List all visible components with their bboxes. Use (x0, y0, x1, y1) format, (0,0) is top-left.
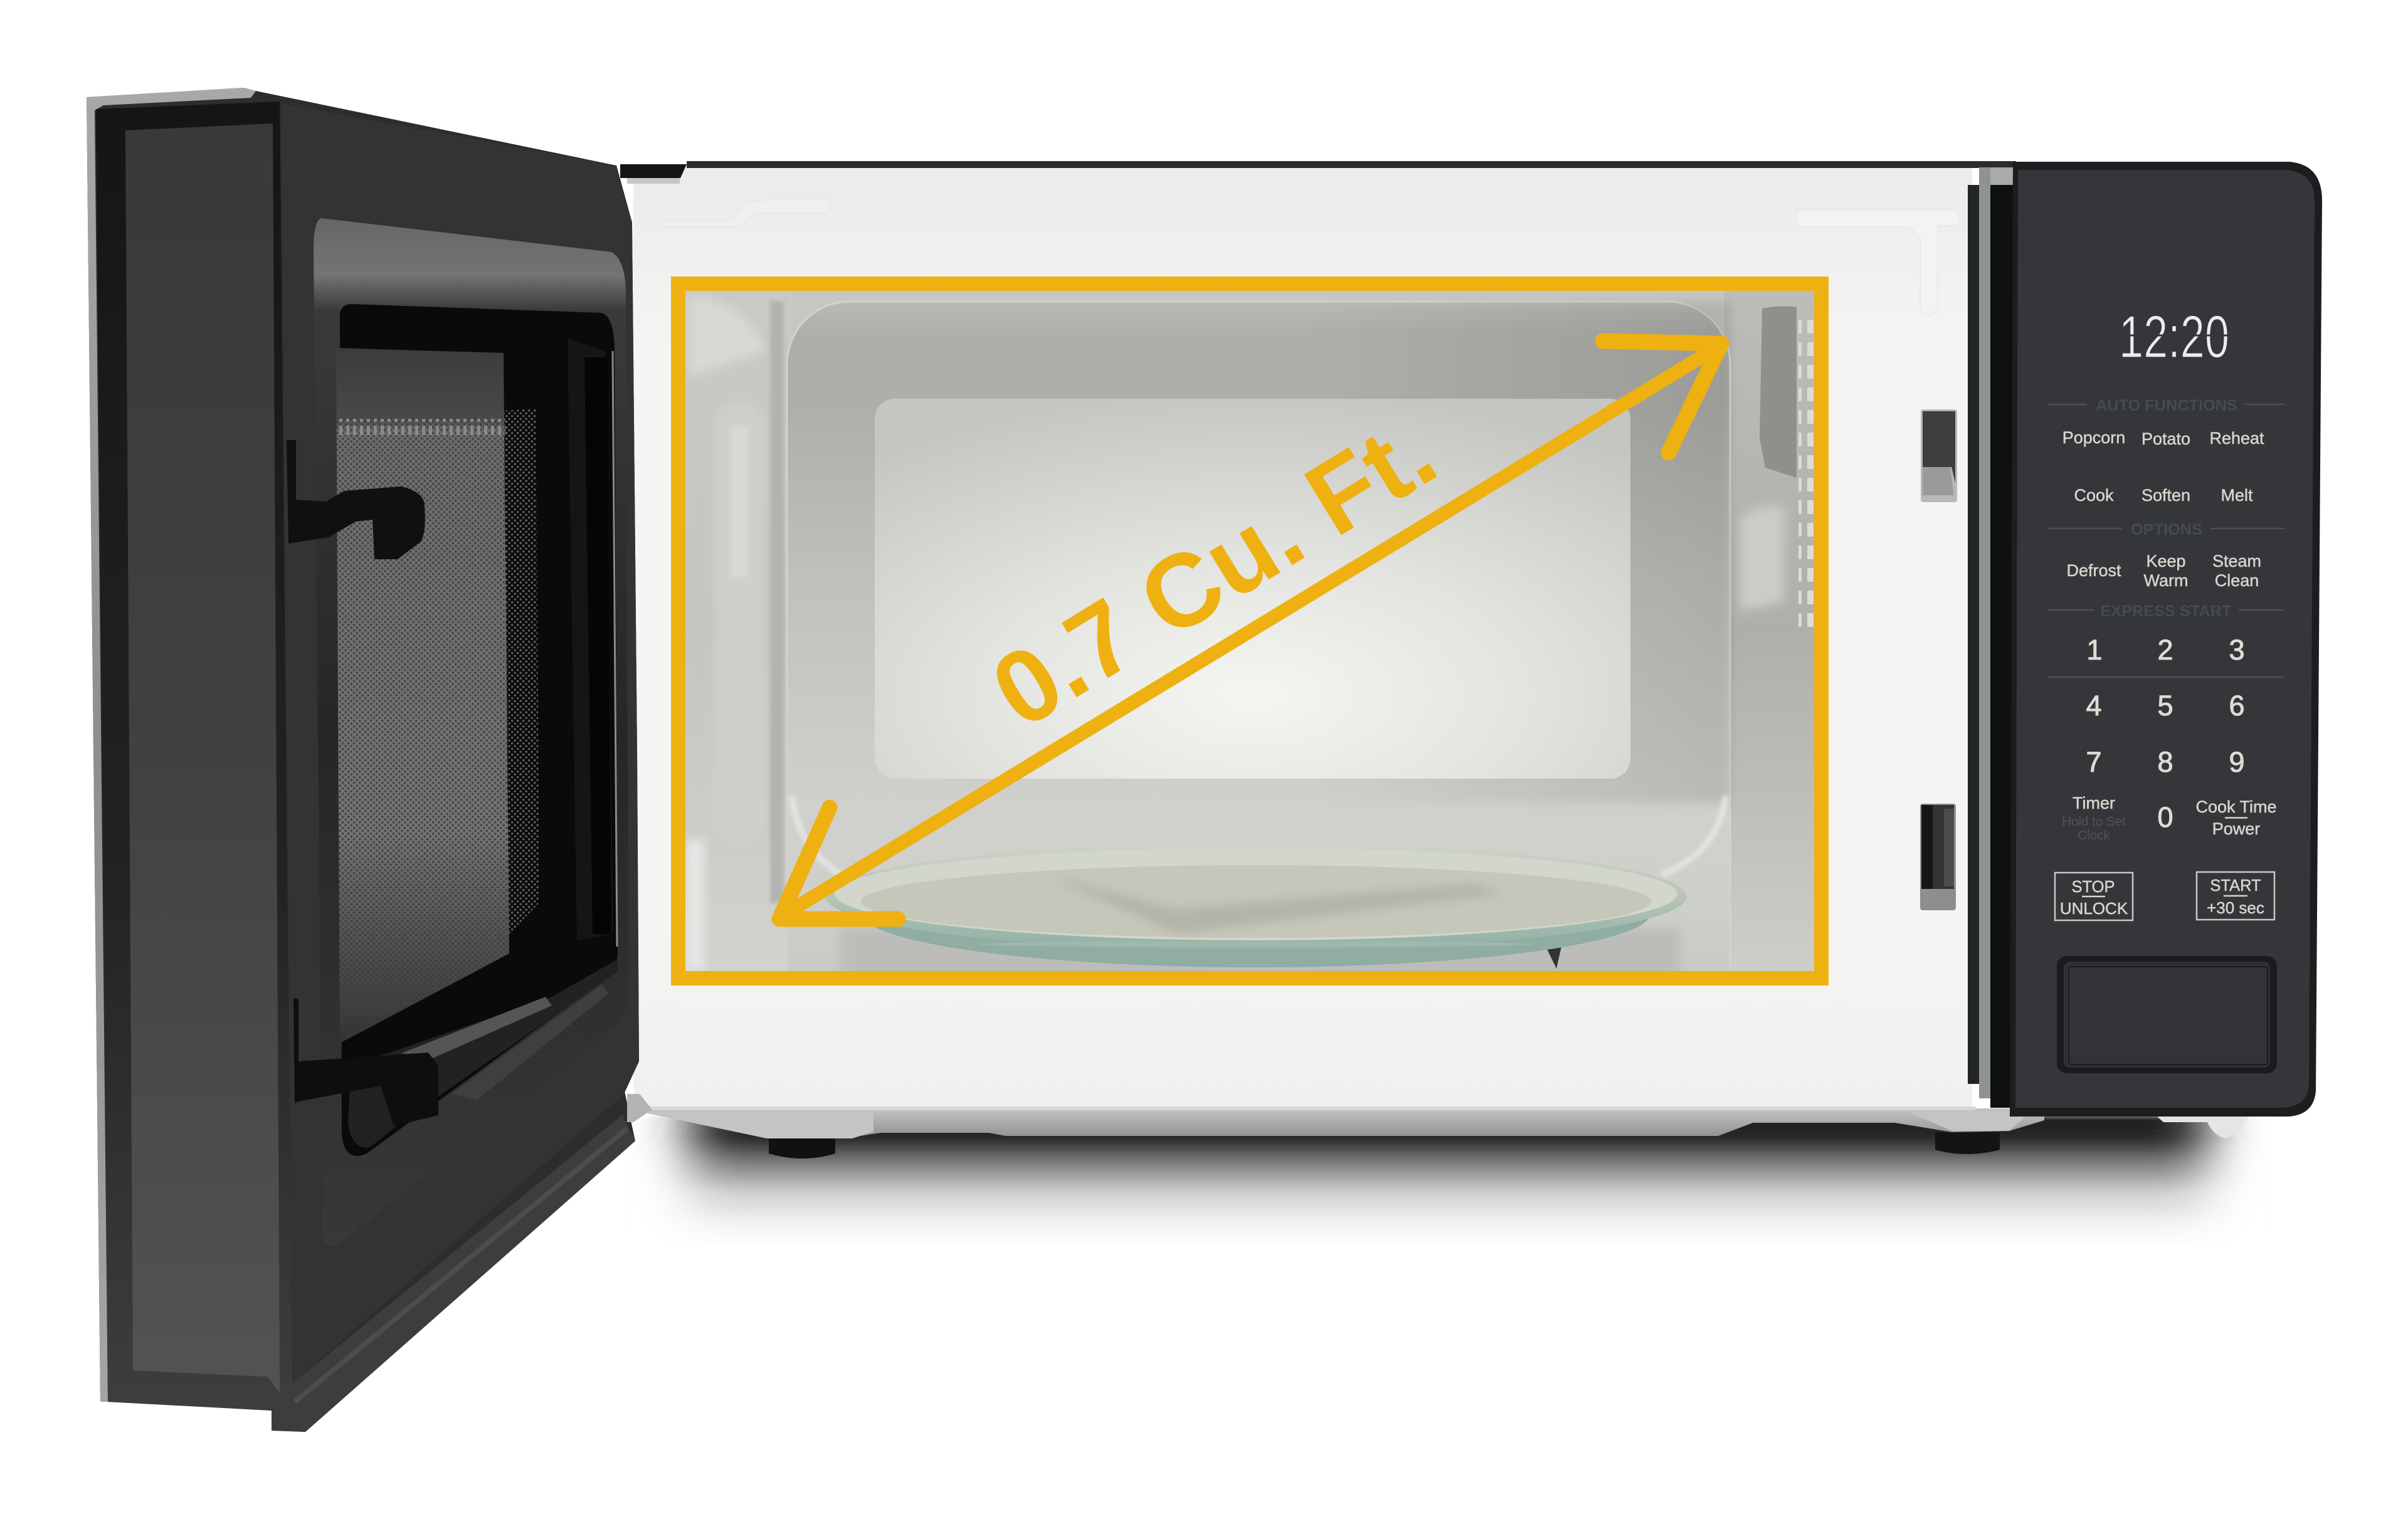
section: express start keypad: 1 (2086, 634, 2103, 666)
section: express start keypad: 3 (2229, 634, 2245, 666)
section: auto functions (2048, 397, 2284, 505)
floor strip (840, 928, 1681, 971)
top edge (687, 161, 2016, 168)
mesh screen (336, 418, 512, 1001)
open door (87, 88, 639, 1432)
start button: +30 sec (2207, 898, 2264, 917)
diagonal double arrow (779, 341, 1721, 919)
section: options: Clean (2215, 571, 2259, 590)
section: express start keypad: 2 (2157, 634, 2173, 666)
top door slot (1921, 409, 1957, 502)
turntable support (1547, 947, 1561, 969)
section: auto functions: Popcorn (2062, 428, 2125, 447)
top latch hook (287, 440, 425, 559)
side panel (125, 124, 280, 1392)
control panel (2010, 162, 2322, 1117)
door front gasket (281, 103, 639, 1384)
yellow cavity frame (679, 283, 1821, 978)
main rim (825, 843, 1687, 950)
glass turntable (825, 843, 1687, 969)
section: express start keypad: EXPRESS START (2101, 602, 2232, 620)
window glass (336, 348, 509, 1043)
bottom latch hook (293, 999, 438, 1126)
cavity right shading (1465, 300, 1731, 805)
glossy inner tray (314, 218, 628, 1246)
floor shadow (690, 1116, 2207, 1248)
section: express start keypad: 7 (2086, 746, 2102, 778)
door release button (2057, 956, 2277, 1073)
cook time key: Power (2212, 819, 2260, 838)
right side light reflection (1740, 507, 1784, 611)
cook time key (2195, 797, 2277, 838)
top hinge (620, 164, 687, 178)
capacity label: 0.7 Cu. Ft. (973, 393, 1455, 750)
timer key: Clock (2078, 828, 2110, 843)
section: options: Defrost (2066, 561, 2121, 580)
section: auto functions: Soften (2141, 486, 2190, 505)
right rail (568, 339, 617, 947)
silver edge (87, 88, 256, 1402)
section: options: OPTIONS (2131, 521, 2202, 539)
base tray (636, 1106, 2249, 1159)
section: express start keypad: 5 (2157, 690, 2173, 722)
rounded cavity (786, 301, 1731, 971)
lower rim (874, 918, 1649, 967)
back wall panel (875, 399, 1630, 779)
right jamb strips (1968, 167, 2013, 1108)
vent holes (1798, 320, 1814, 633)
section: auto functions: Reheat (2209, 429, 2264, 448)
timer key: Hold to Set (2062, 814, 2126, 829)
embossed mark right (1795, 210, 1960, 315)
cavity interior (685, 291, 1814, 971)
embossed mark left (665, 199, 833, 227)
start button: START (2210, 877, 2261, 895)
dark mesh side (504, 409, 539, 934)
section: options (2048, 521, 2284, 590)
plate centre (861, 865, 1651, 938)
white front frame (633, 167, 1972, 1108)
cavity base fill (792, 291, 1724, 337)
lower wall swooshes (791, 796, 1726, 878)
section: express start keypad: 8 (2157, 746, 2173, 778)
top hinge glint (627, 178, 680, 184)
section: express start keypad: 9 (2229, 746, 2245, 778)
section: options: Warm (2144, 571, 2188, 590)
right side waveguide cover (1760, 306, 1797, 478)
left front wall (685, 850, 786, 971)
microwave body (620, 161, 2016, 1108)
right foot (1935, 1132, 2000, 1154)
bottom door slot (1920, 804, 1956, 910)
outer side frame (96, 102, 292, 1411)
plate reflection (1047, 875, 1505, 934)
capacity overlay (679, 283, 1821, 978)
clock display: 12:20 (2119, 303, 2229, 371)
timer key (2062, 794, 2126, 843)
section: express start keypad: 6 (2229, 690, 2245, 722)
cook time key: Cook Time (2195, 797, 2277, 816)
left front wall highlights (685, 295, 784, 971)
start button (2197, 872, 2274, 920)
section: express start keypad (2047, 602, 2284, 833)
section: options: Keep (2146, 552, 2186, 570)
section: auto functions: Cook (2074, 486, 2114, 505)
panel face (2015, 170, 2315, 1108)
stop unlock button: UNLOCK (2060, 899, 2128, 918)
panel bezel (2010, 162, 2322, 1117)
stop unlock button (2055, 873, 2133, 920)
stop unlock button: STOP (2072, 878, 2115, 896)
timer key: Timer (2073, 794, 2115, 812)
section: express start keypad: 0 (2157, 801, 2173, 833)
window opening (340, 304, 618, 1156)
mesh highlight band (336, 419, 505, 435)
right rear foot tab (2157, 1117, 2249, 1138)
lower glossy ledge (348, 959, 618, 1147)
left foot (769, 1138, 835, 1159)
bottom hinge (627, 1094, 652, 1122)
right front wall (1724, 291, 1814, 806)
section: auto functions: AUTO FUNCTIONS (2096, 397, 2237, 414)
section: auto functions: Potato (2141, 429, 2190, 448)
section: options: Steam (2212, 552, 2261, 570)
door silhouette (87, 88, 639, 1432)
section: auto functions: Melt (2221, 486, 2253, 505)
bottom lip (272, 1115, 635, 1432)
section: express start keypad: 4 (2086, 690, 2102, 722)
